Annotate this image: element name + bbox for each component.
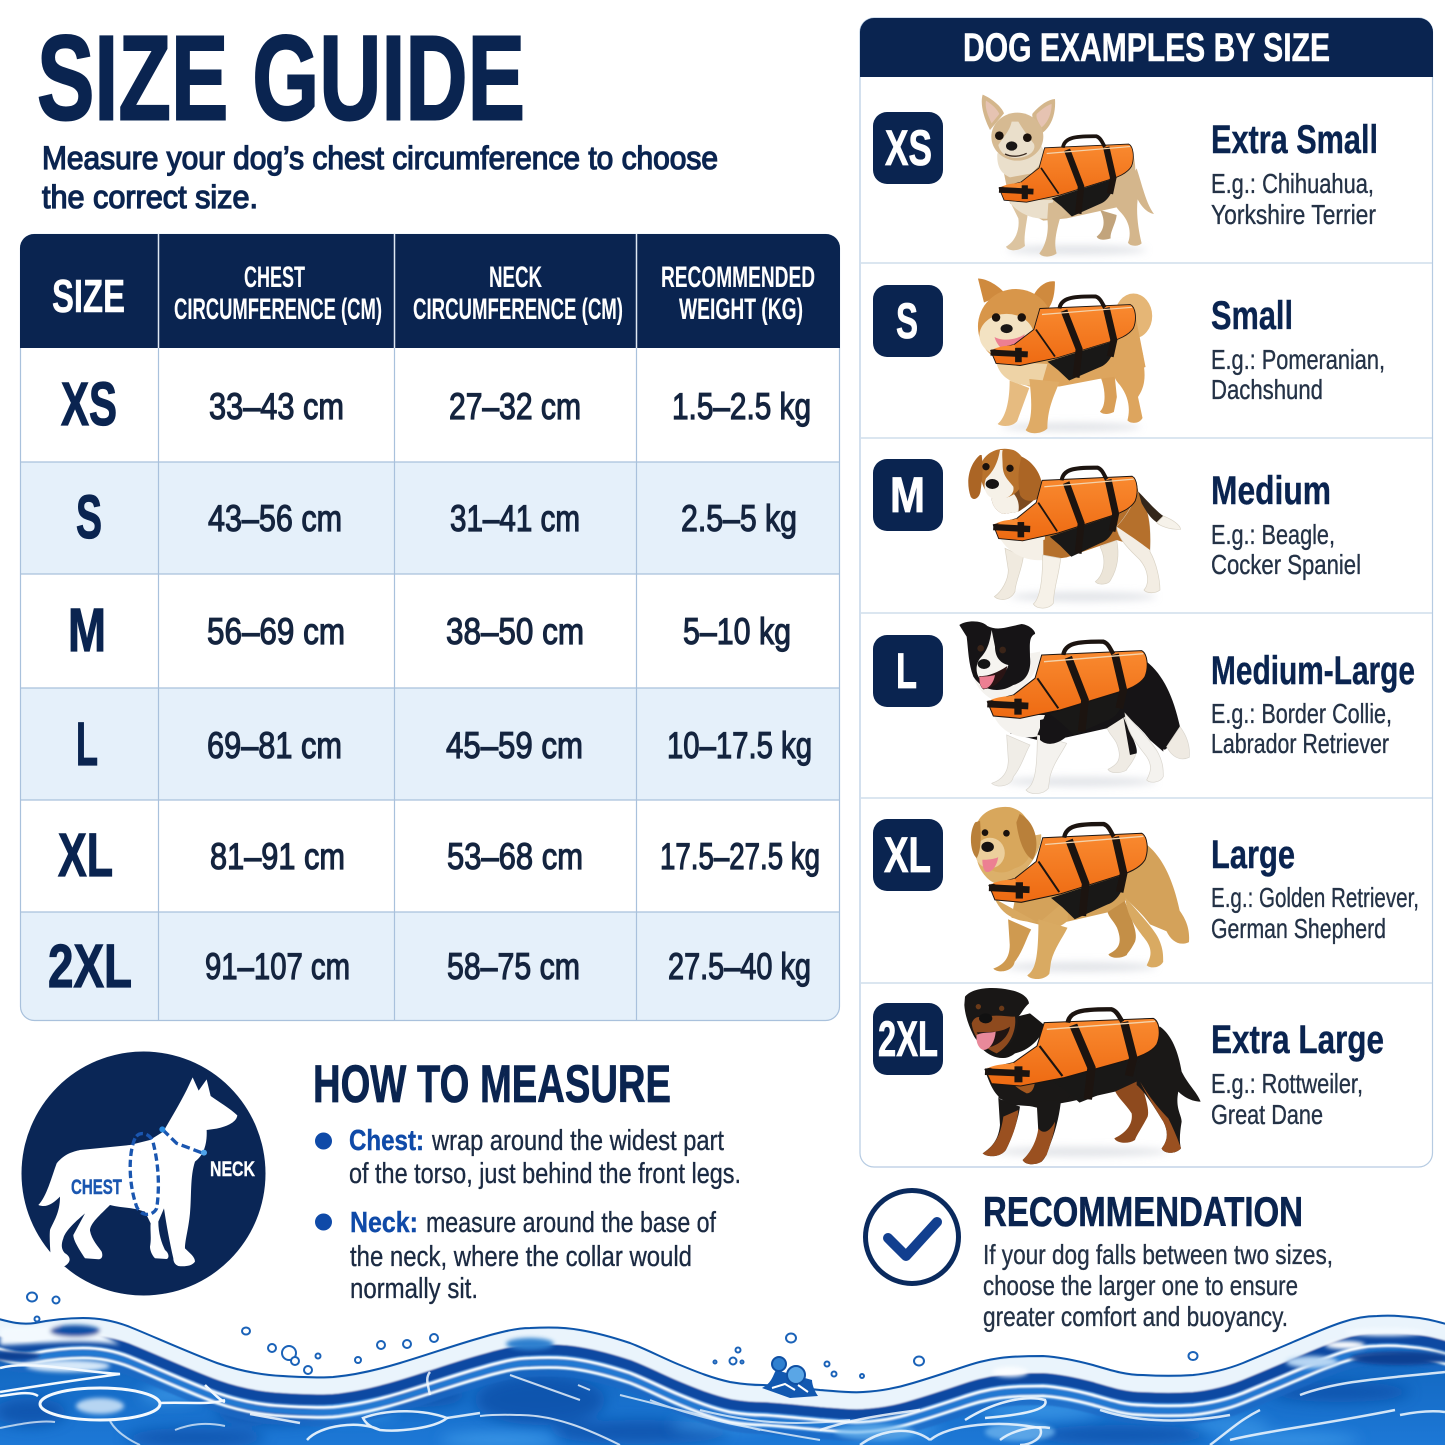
recommendation text	[983, 1239, 1333, 1332]
panel header	[860, 18, 1433, 77]
row XS: 27–32 cm	[449, 386, 581, 427]
badge XS: XS	[885, 120, 932, 176]
row: S	[873, 278, 1385, 433]
row S: 31–41 cm	[450, 498, 580, 539]
row M: M	[68, 596, 106, 664]
size table	[20, 234, 840, 1021]
breed examples: E.g.: Pomeranian,	[1211, 344, 1385, 375]
breed examples	[1211, 1068, 1363, 1130]
badge 2XL	[873, 1003, 943, 1075]
water splash	[762, 1357, 818, 1398]
breed examples: Labrador Retriever	[1211, 728, 1389, 759]
row M	[68, 596, 791, 664]
dog: rottweiler	[964, 988, 1201, 1164]
row L	[76, 710, 812, 778]
row L: L	[76, 710, 98, 778]
row: XS	[873, 95, 1378, 257]
size name: Medium	[1211, 469, 1331, 513]
badge XL: XL	[884, 827, 931, 883]
dog: golden retriever	[971, 807, 1189, 979]
breed examples: Cocker Spaniel	[1211, 549, 1361, 580]
row XL	[58, 821, 820, 889]
badge 2XL: 2XL	[878, 1011, 938, 1067]
breed examples: Great Dane	[1211, 1099, 1323, 1130]
breed examples: E.g.: Border Collie,	[1211, 698, 1392, 729]
row 2XL	[48, 932, 811, 1000]
row L: 45–59 cm	[446, 725, 583, 766]
badge S	[873, 285, 943, 357]
row XS: 33–43 cm	[209, 386, 344, 427]
subtitle: the correct size.	[42, 179, 258, 215]
panel: dog examples	[860, 18, 1433, 1167]
row XL: XL	[58, 821, 113, 889]
chest instruction: Chest:	[349, 1125, 424, 1157]
dog: beagle	[968, 449, 1181, 608]
row XL: 53–68 cm	[447, 836, 583, 877]
neck instruction: measure around the base of	[426, 1207, 717, 1239]
size name: Extra Large	[1211, 1018, 1384, 1062]
size name: Large	[1211, 833, 1295, 877]
neck instruction: normally sit.	[350, 1273, 478, 1305]
row XL: 17.5–27.5 kg	[660, 836, 820, 877]
chest measuring line	[130, 1134, 158, 1214]
breed examples: E.g.: Rottweiler,	[1211, 1068, 1363, 1099]
breed examples	[1211, 168, 1376, 230]
row 2XL: 58–75 cm	[447, 946, 580, 987]
breed examples	[1211, 698, 1392, 759]
neck instruction	[315, 1207, 717, 1305]
breed examples: Yorkshire Terrier	[1211, 199, 1376, 230]
table header: WEIGHT (KG)	[679, 293, 803, 326]
row: M	[873, 449, 1361, 608]
breed examples: German Shepherd	[1211, 913, 1386, 944]
chest label: CHEST	[71, 1176, 122, 1199]
badge L	[873, 635, 943, 707]
how to measure heading: HOW TO MEASURE	[313, 1055, 671, 1114]
row XS: 1.5–2.5 kg	[672, 386, 811, 427]
panel header: DOG EXAMPLES BY SIZE	[963, 26, 1330, 70]
row S: 43–56 cm	[208, 498, 342, 539]
chest instruction	[315, 1125, 741, 1190]
breed examples	[1211, 344, 1385, 405]
table header	[52, 261, 815, 326]
water band	[0, 1300, 1445, 1445]
table header: SIZE	[52, 270, 125, 322]
measuring diagram	[22, 1052, 266, 1296]
neck instruction: Neck:	[350, 1207, 418, 1239]
row L: 10–17.5 kg	[667, 725, 812, 766]
size name: Extra Small	[1211, 118, 1378, 162]
recommendation heading: RECOMMENDATION	[983, 1188, 1303, 1235]
recommendation text: choose the larger one to ensure	[983, 1270, 1298, 1301]
row 2XL: 27.5–40 kg	[668, 946, 811, 987]
table header: CHEST	[244, 261, 305, 294]
badge XL	[873, 819, 943, 891]
caustic cells	[0, 1365, 1445, 1445]
badge XS	[873, 112, 943, 184]
row: L	[873, 621, 1415, 794]
title: SIZE GUIDE	[37, 10, 525, 146]
badge M: M	[890, 467, 925, 523]
neck instruction: the neck, where the collar would	[350, 1241, 692, 1273]
dog: pomeranian	[978, 278, 1152, 433]
badge L: L	[896, 643, 917, 699]
recommendation text: If your dog falls between two sizes,	[983, 1239, 1333, 1270]
row 2XL: 2XL	[48, 932, 132, 1000]
table header: RECOMMENDED	[661, 261, 815, 294]
neck label: NECK	[210, 1158, 255, 1181]
row: XL	[873, 807, 1419, 979]
chest instruction: wrap around the widest part	[431, 1125, 724, 1157]
row XL: 81–91 cm	[210, 836, 345, 877]
dog: border collie	[959, 621, 1190, 794]
size name: Small	[1211, 294, 1293, 338]
water droplets	[27, 1292, 1198, 1378]
badge M	[873, 459, 943, 531]
row S	[76, 483, 797, 551]
icon: check mark	[866, 1190, 958, 1284]
badge S: S	[896, 293, 918, 349]
breed examples	[1211, 519, 1361, 580]
row XS	[61, 370, 811, 438]
chest instruction: of the torso, just behind the front legs.	[349, 1158, 741, 1190]
recommendation text: greater comfort and buoyancy.	[983, 1301, 1288, 1332]
table header: CIRCUMFERENCE (CM)	[174, 293, 382, 326]
icon: dog silhouette	[38, 1077, 237, 1266]
breed examples: Dachshund	[1211, 374, 1323, 405]
subtitle: Measure your dog’s chest circumference to choose	[42, 140, 718, 176]
subtitle	[42, 140, 718, 215]
surface ribbons	[0, 1325, 1445, 1438]
row 2XL: 91–107 cm	[205, 946, 350, 987]
row: 2XL	[873, 988, 1384, 1164]
table header: CIRCUMFERENCE (CM)	[413, 293, 623, 326]
row M: 5–10 kg	[683, 611, 791, 652]
row L: 69–81 cm	[207, 725, 342, 766]
row S: S	[76, 483, 102, 551]
row M: 56–69 cm	[207, 611, 345, 652]
table header: NECK	[489, 261, 542, 294]
row M: 38–50 cm	[446, 611, 584, 652]
breed examples: E.g.: Chihuahua,	[1211, 168, 1374, 199]
breed examples: E.g.: Beagle,	[1211, 519, 1335, 550]
dog: chihuahua	[982, 95, 1154, 257]
row S: 2.5–5 kg	[681, 498, 797, 539]
neck measuring line	[159, 1126, 207, 1156]
row XS: XS	[61, 370, 117, 438]
breed examples	[1211, 882, 1419, 944]
